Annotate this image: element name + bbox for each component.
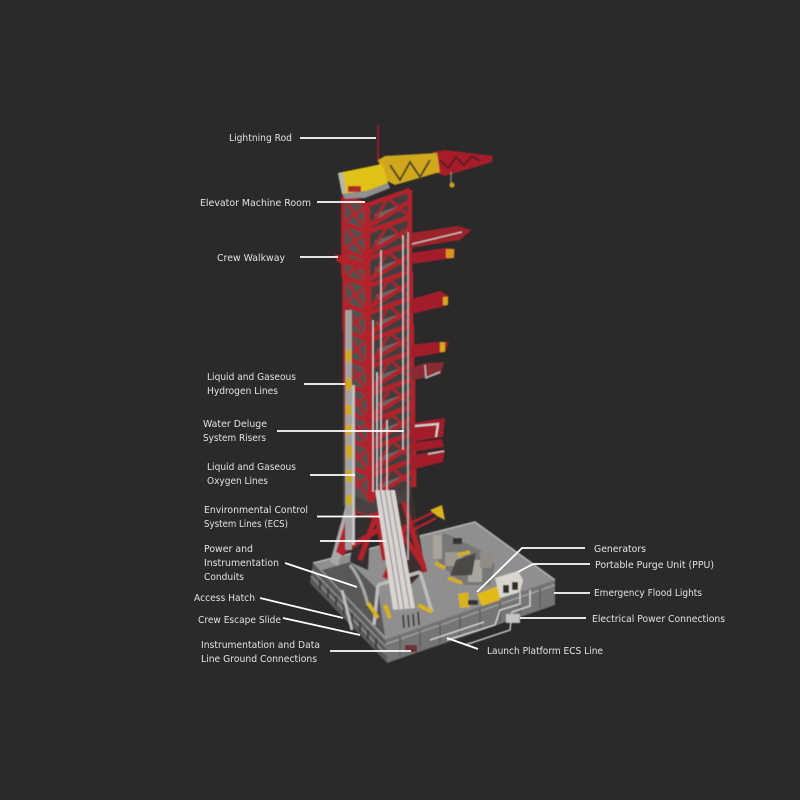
arm 7 (411, 450, 445, 470)
swing arms (411, 226, 472, 531)
label: Electrical Power Connections: Electrical Power Connections (592, 614, 725, 625)
tower pipes (345, 232, 415, 610)
label: Power and Instrumentation Conduits (204, 544, 279, 583)
red boom (433, 150, 493, 176)
arm 3 (411, 342, 449, 358)
tower splayed base legs (330, 490, 432, 630)
label: Power and Instrumentation Conduits: Conduits (204, 572, 244, 583)
arm 6 (411, 439, 444, 452)
launch platform base (310, 522, 555, 663)
label: Liquid and Gaseous Hydrogen Lines: Liquid and Gaseous (207, 372, 296, 383)
label: Environmental Control System Lines (204, 505, 308, 530)
arm 4 (411, 362, 444, 380)
deck machinery (433, 533, 495, 585)
label: Water Deluge System Risers (203, 419, 267, 444)
label: Environmental Control System Lines: Environmental Control (204, 505, 308, 516)
label: Liquid and Gaseous Hydrogen Lines (207, 372, 296, 397)
hook (450, 172, 452, 183)
label: Liquid and Gaseous Oxygen Lines: Liquid and Gaseous (207, 462, 296, 473)
label: Power and Instrumentation Conduits: Power and (204, 544, 253, 555)
arm 2 (411, 291, 449, 314)
tower levels (335, 190, 414, 515)
yellow boom (378, 153, 440, 185)
crane (338, 125, 493, 199)
label: Power and Instrumentation Conduits: Instrumentation (204, 558, 279, 569)
label: Water Deluge System Risers: System Risers (203, 433, 266, 444)
label: Instrumentation and Data Line Ground Connections (201, 640, 320, 665)
label: Launch Platform ECS Line: Launch Platform ECS Line (487, 646, 603, 657)
leader lines (260, 138, 590, 651)
label: Water Deluge System Risers: Water Deluge (203, 419, 267, 430)
generators (458, 592, 470, 608)
label: Generators: Generators (594, 544, 646, 555)
label: Emergency Flood Lights: Emergency Flood Lights (594, 588, 702, 599)
label: Portable Purge Unit: Portable Purge Unit (PPU) (595, 560, 714, 571)
platform left face (310, 563, 387, 663)
label: Liquid and Gaseous Oxygen Lines (207, 462, 296, 487)
label: Crew Walkway: Crew Walkway (217, 253, 285, 264)
arm 5 (411, 418, 445, 442)
arm 1 (411, 226, 472, 248)
label: Instrumentation and Data Line Ground Connections: Instrumentation and Data (201, 640, 320, 651)
gaseous lines column (345, 310, 352, 550)
portable purge unit (495, 571, 523, 598)
label: Environmental Control System Lines: System Lines (ECS) (204, 519, 288, 530)
label: Lightning Rod: Lightning Rod (229, 133, 292, 144)
cab (338, 164, 388, 194)
crew walkway (335, 254, 365, 270)
platform right face (385, 580, 555, 663)
label: Instrumentation and Data Line Ground Connections: Line Ground Connections (201, 654, 317, 665)
label: Crew Escape Slide: Crew Escape Slide (198, 615, 281, 626)
water deluge bundle (375, 490, 415, 610)
platform deck (313, 522, 555, 640)
label: Elevator Machine Room: Elevator Machine Room (200, 198, 311, 209)
lightning rod (377, 125, 379, 162)
label: Access Hatch: Access Hatch (194, 593, 255, 604)
label: Liquid and Gaseous Hydrogen Lines: Hydrogen Lines (207, 386, 278, 397)
arm 8 (411, 510, 438, 531)
label: Liquid and Gaseous Oxygen Lines: Oxygen Lines (207, 476, 268, 487)
